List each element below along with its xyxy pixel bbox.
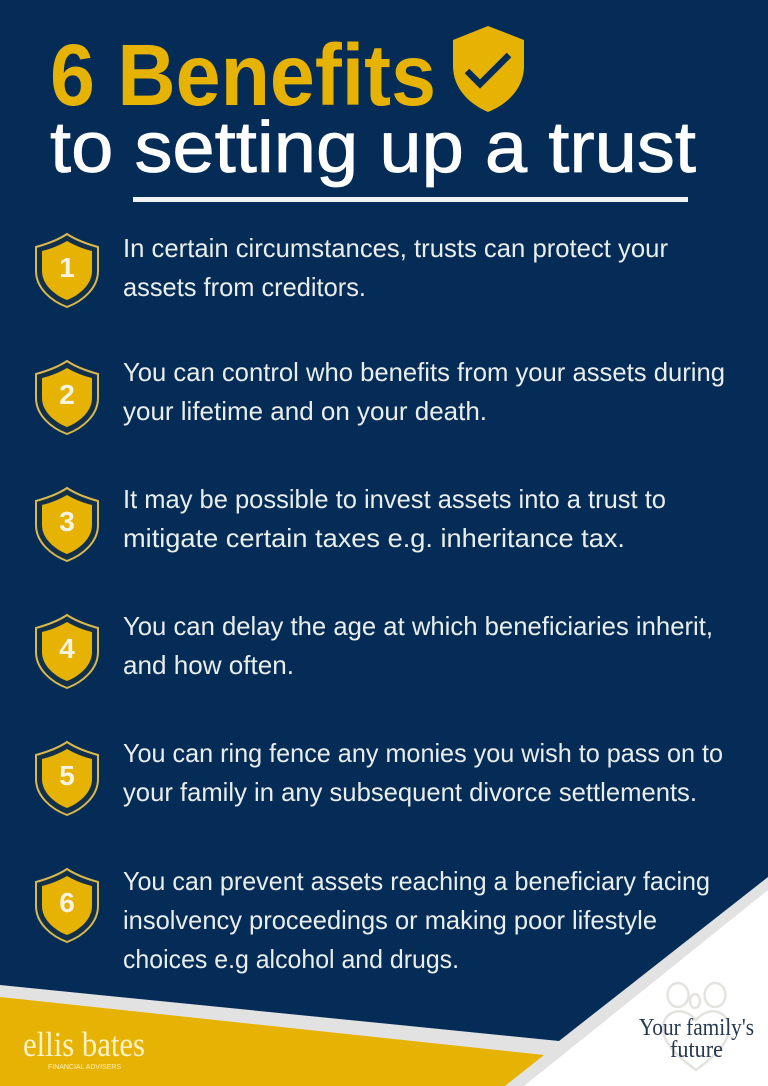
icon: family heart outline — [663, 983, 729, 1070]
text: benefit 6: choices e.g alcohol and drugs. — [123, 944, 459, 974]
tagline: your family's future — [639, 1015, 754, 1063]
benefit 6 — [36, 866, 710, 974]
text: benefit 3: mitigate certain taxes e.g. inheritance tax. — [123, 523, 625, 553]
icon: shield 4 — [36, 615, 98, 688]
text: benefit 5: your family in any subsequent divorce settlements. — [123, 777, 697, 807]
text: benefit 2: You can control who benefits from your assets during — [123, 357, 725, 387]
text: benefit 5: You can ring fence any monies you wish to pass on to — [123, 738, 723, 768]
icon: shield 1 — [36, 234, 98, 307]
text: benefit 3: It may be possible to invest assets into a trust to — [123, 484, 666, 514]
benefit 1 — [36, 233, 668, 307]
grey footer band — [0, 877, 768, 1086]
text: benefit 1: In certain circumstances, trusts can protect your — [123, 233, 668, 263]
text: benefit 4: You can delay the age at which beneficiaries inherit, — [123, 611, 713, 641]
text: benefit 6 — [123, 866, 710, 974]
yellow footer panel — [0, 997, 544, 1086]
icon: shield 6: 6 — [59, 887, 75, 918]
icon: shield 5 — [36, 742, 98, 815]
logo: ellis bates: FINANCIAL ADVISERS — [48, 1064, 121, 1071]
icon: shield 5: 5 — [59, 760, 75, 791]
icon: shield 2: 2 — [59, 379, 75, 410]
text: benefit 1: assets from creditors. — [123, 272, 366, 302]
icon: shield 1: 1 — [59, 252, 75, 283]
logo: ellis bates: ellis bates — [23, 1025, 145, 1064]
benefit 4 — [36, 611, 713, 688]
icon: shield 4: 4 — [59, 633, 75, 664]
text: benefit 6: You can prevent assets reaching a beneficiary facing — [123, 866, 710, 896]
icon: shield 3: 3 — [59, 506, 75, 537]
benefit 2 — [36, 357, 725, 434]
benefit 5 — [36, 738, 723, 815]
text: benefit 3 — [123, 484, 666, 553]
title — [50, 27, 696, 188]
icon: shield 6 — [36, 869, 98, 942]
text: benefit 6: insolvency proceedings or making poor lifestyle — [123, 905, 657, 935]
text: benefit 2 — [123, 357, 725, 426]
tagline: your family's future: Your family's — [639, 1015, 754, 1041]
text: benefit 4 — [123, 611, 713, 680]
text: benefit 1 — [123, 233, 668, 302]
title underline — [133, 197, 688, 202]
icon: shield 3 — [36, 488, 98, 561]
icon: shield with check — [453, 26, 524, 112]
white corner panel — [524, 890, 768, 1086]
text: benefit 4: and how often. — [123, 650, 294, 680]
title: 6 Benefits — [50, 27, 436, 124]
tagline: your family's future: future — [670, 1037, 723, 1063]
text: benefit 2: your lifetime and on your death. — [123, 396, 487, 426]
benefit 3 — [36, 484, 666, 561]
text: benefit 5 — [123, 738, 723, 807]
title: to setting up a trust — [50, 108, 696, 188]
icon: shield 2 — [36, 361, 98, 434]
